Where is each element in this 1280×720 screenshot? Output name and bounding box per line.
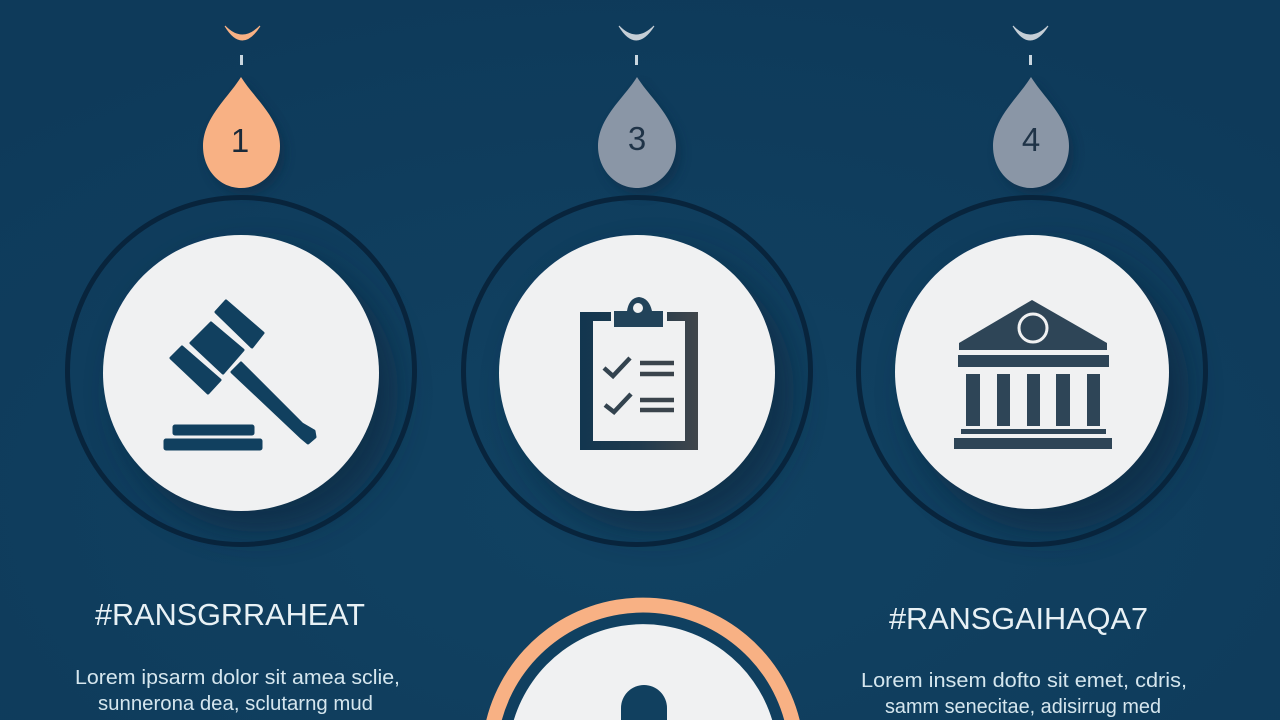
icon: clipboard checklist [580,297,698,450]
body text 4: Lorem insem dofto sit emet, cdris, [861,670,1187,692]
ring and disc 4 [858,198,1206,544]
droplet 1 [203,77,285,195]
ring and disc 1 [68,198,414,544]
tick 1 [240,55,243,65]
column 2: step 3 [464,26,810,720]
icon: gavel [165,301,315,449]
tick 4 [1029,55,1032,65]
ring and disc 3 [464,198,810,544]
bottom lock disc [486,598,800,720]
body text 1: Lorem ipsarm dolor sit amea sclie, [75,667,400,689]
droplet 3 [598,77,681,195]
hanging arc 3 [619,26,654,40]
body text 1: sunnerona dea, sclutarng mud [98,693,373,715]
droplet 1: 1 [231,122,249,159]
body text 4: samm senecitae, adisirrug med [885,696,1161,718]
tick 3 [635,55,638,65]
droplet 4 [993,77,1074,195]
body text 1 [75,667,400,715]
icon: bank building [954,300,1112,449]
body text 4 [861,670,1187,718]
column 1: step 1 [68,26,414,715]
droplet 3: 3 [628,120,646,157]
column 3: step 4 [858,26,1206,718]
droplet 4: 4 [1022,121,1040,158]
icon: keyhole [621,685,667,720]
hanging arc 4 [1013,26,1048,40]
hanging arc 1 [225,26,260,40]
heading 4: #RANSGAIHAQA7 [889,601,1148,636]
heading 1: #RANSGRRAHEAT [95,597,365,632]
